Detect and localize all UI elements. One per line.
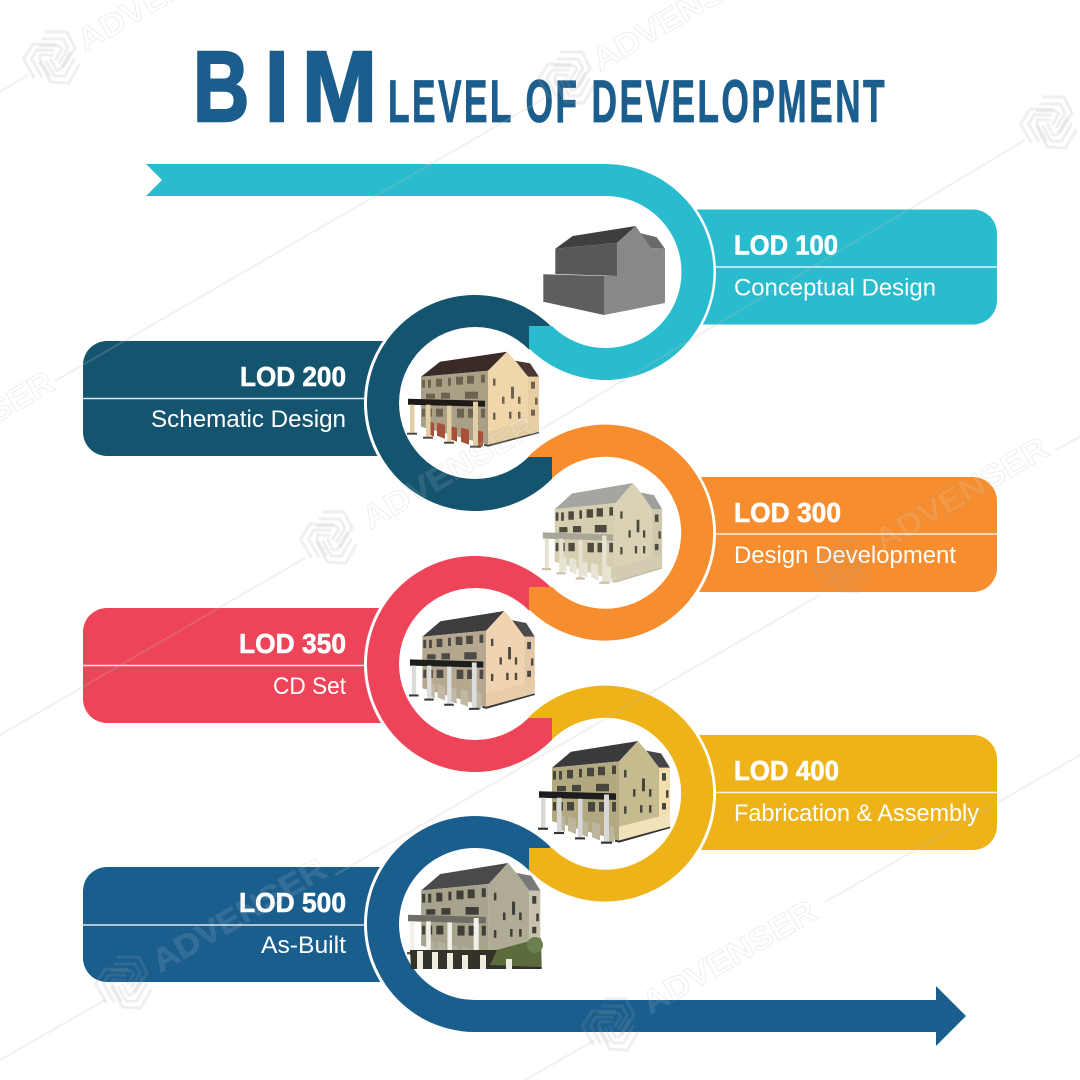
icon: LOD 500 building with site xyxy=(407,863,543,969)
panel: LOD 100 xyxy=(640,210,997,324)
title: BIM: M xyxy=(302,32,377,143)
title xyxy=(193,30,887,143)
label: LOD 300: LOD 300 xyxy=(734,497,841,528)
label: LOD 350: CD Set xyxy=(273,673,346,700)
label: LOD 200: LOD 200 xyxy=(240,361,346,392)
label: LOD 500: As-Built xyxy=(261,932,346,959)
label: LOD 100: LOD 100 xyxy=(734,230,838,260)
icon: LOD 100 massing model xyxy=(543,226,665,315)
label: LOD 100 xyxy=(734,230,936,302)
ribbon: pink ring xyxy=(367,556,552,772)
watermark: Advenser logos, wordmarks and diagonal lines: ADVENSER xyxy=(146,850,332,979)
arrow: blue ribbon ending in arrowhead xyxy=(367,816,966,1046)
label: LOD 500: LOD 500 xyxy=(239,887,346,918)
watermark: Advenser logos, wordmarks and diagonal lines: ADVENSER xyxy=(636,892,822,1021)
ribbon: dark teal ring xyxy=(367,295,552,511)
panel: LOD 400 xyxy=(640,735,997,850)
label: LOD 400: Fabrication & Assembly xyxy=(734,800,979,827)
icon: LOD 300 building xyxy=(542,483,662,584)
label: LOD 350: LOD 350 xyxy=(239,628,346,659)
title: BIM xyxy=(193,30,377,143)
label: LOD 300: Design Development xyxy=(734,542,956,569)
ribbon: orange ring xyxy=(528,425,713,641)
icon: LOD 400 building xyxy=(538,741,670,844)
title: BIM: I xyxy=(265,30,289,143)
label: LOD 200 xyxy=(151,361,346,433)
label: LOD 100: Conceptual Design xyxy=(734,274,936,302)
ribbon: cyan start with notched tail xyxy=(146,164,714,380)
icon: LOD 350 building xyxy=(409,611,535,710)
label: LOD 400: LOD 400 xyxy=(734,755,839,786)
label: LOD 200: Schematic Design xyxy=(151,406,346,433)
ribbon: yellow ring xyxy=(528,686,713,902)
label: LOD 500 xyxy=(239,887,346,959)
panel: LOD 300 xyxy=(640,477,997,592)
panel: LOD 500 xyxy=(83,867,440,982)
watermark: Advenser logos, wordmarks and diagonal lines: ADVENSER xyxy=(356,407,542,536)
icon: LOD 200 building xyxy=(407,352,539,448)
panel: LOD 350 xyxy=(83,608,440,723)
label: LOD 400 xyxy=(734,755,979,827)
panel: LOD 200 xyxy=(83,341,440,456)
watermark: Advenser logos, wordmarks and diagonal lines: ADVENSER xyxy=(868,429,1054,558)
label: LOD 300 xyxy=(734,497,956,569)
title: BIM: B xyxy=(193,32,249,143)
label: LOD 350 xyxy=(239,628,346,700)
